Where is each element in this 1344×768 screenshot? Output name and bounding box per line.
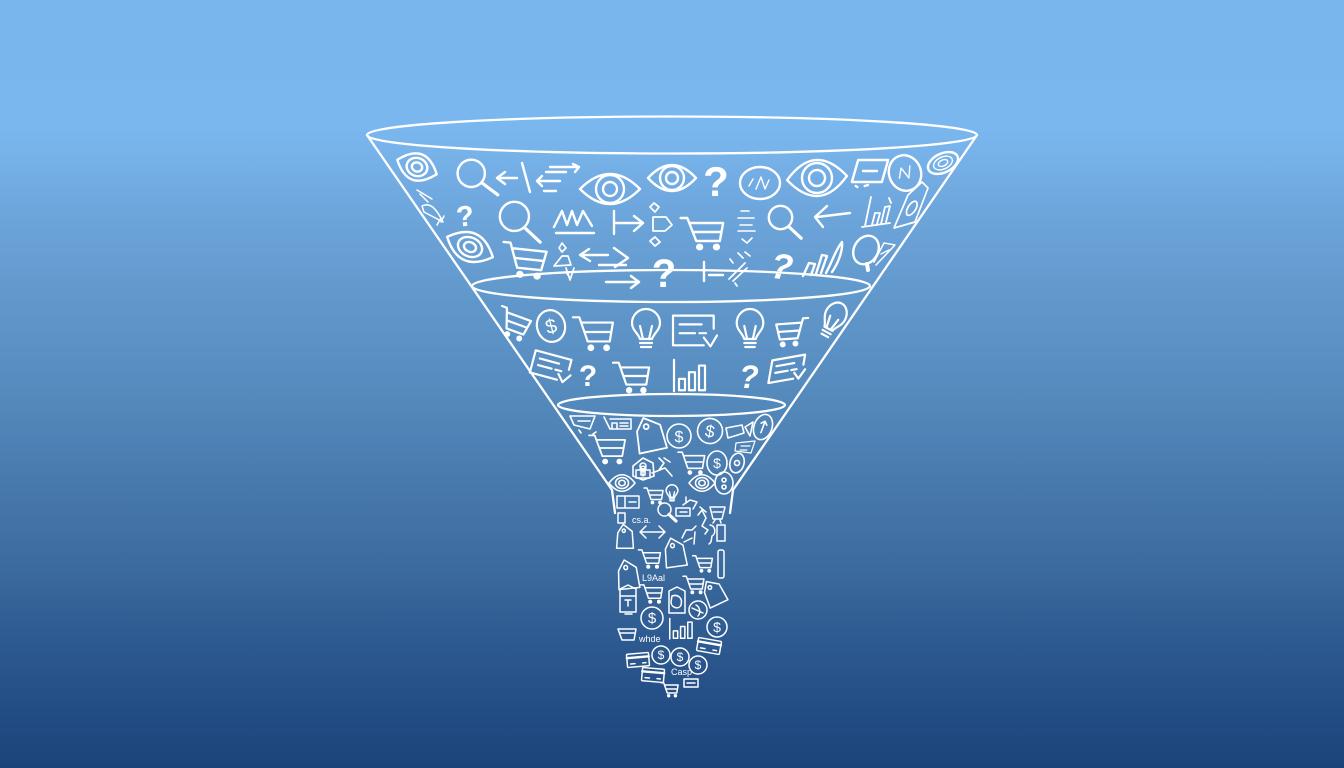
icon: cart [613,363,649,392]
icon: dollar coin: $ [695,658,702,672]
icon: small document [874,243,895,265]
tier 1: awareness icons [393,147,962,296]
icon: credit card [641,667,665,683]
icon: cart [683,576,704,593]
icon: diamond stack [650,203,672,246]
icon: dollar coin [696,417,724,445]
icon: magnifier [769,206,801,238]
icon: dollar coin: $ [677,650,684,664]
icon: small card [684,679,698,687]
icon: slanted tag [894,182,928,228]
icon: zigzag [554,211,594,233]
icon: light bulb [666,485,678,501]
hand-drawn label: Casp [671,667,692,677]
icon: plug box [620,585,636,614]
icon: arrow lines [537,164,579,191]
icon: cart [661,683,678,697]
icon: document and arrow [726,422,753,438]
lower rim [558,394,785,416]
icon: eye [689,475,715,491]
icon: cart [678,452,705,474]
icon: question mark: ? [652,252,676,296]
hand-drawn label: L9Aal [642,573,665,583]
icon: bar and arrow [614,211,643,234]
icon: bar chart [670,618,692,639]
icon: cart [776,318,810,347]
icon: tag [616,559,640,590]
icon: bars box [617,496,639,523]
icon: globe lantern [669,587,685,613]
icon: cart [693,556,712,572]
icon: document with check [673,316,717,346]
icon: light bulb [632,309,660,347]
icon: dollar coin [707,451,727,475]
icon: italic question mark: ? [768,245,796,288]
icon: dollar coin: $ [648,610,657,627]
spout: falling icons [616,466,728,697]
icon: circle with arrow [750,412,776,442]
icon: scribble [682,526,696,544]
icon: dollar coin: $ [704,421,717,442]
icon: cart [493,306,532,342]
icon: tag [617,524,633,548]
icon: pencil marks [729,252,750,286]
icon: dollar coin: $ [713,455,721,471]
funnel rims [367,116,977,416]
icon: cart [640,585,662,603]
icon: question mark: ? [703,158,729,205]
icon: question mark: ? [579,360,597,393]
icon: dollar coin: $ [713,619,721,635]
icon: credit card [626,652,650,668]
icon: question mark: ? [455,200,475,234]
icon: tall rectangle [718,550,724,578]
icon: dollar coin: $ [675,429,684,446]
icon: stacked dashes [738,211,755,243]
icon: tag [633,414,667,454]
icon: eye [580,174,640,204]
icon: small coin [689,601,707,619]
funnel right side [730,135,977,513]
icon: dollar coin: $ [658,648,665,662]
icon: small cart [710,507,725,523]
icon: dollar coin [641,607,663,629]
hand-drawn label: cs.a. [632,515,651,525]
icon: tag [662,536,687,568]
tier 3: decision icons [570,412,776,494]
icon: credit card [696,637,722,655]
icon: slanted document [850,160,888,187]
icon: scribble [698,510,708,534]
icon: tilted light bulb [816,299,851,340]
icon: magnifier [658,503,676,521]
icon: eye [648,165,696,191]
icon: eye [393,147,441,187]
icon: cart [500,242,547,279]
icon: small circle [715,472,733,494]
icon: dollar coin [533,307,569,345]
icon: rising bars [803,242,842,276]
icon: small basket [618,629,636,640]
icon: small circle [728,452,746,474]
icon: dollar coin [671,648,689,666]
icon: cart [589,435,625,463]
icon: circle with wave [740,167,780,199]
icon: bar chart [674,360,705,391]
icon: dollar coin: $ [543,315,559,339]
icon: light bulb [737,309,763,347]
icon: dollar coin [689,656,707,674]
icon: dollar coin [707,617,727,637]
icon: magnifier [456,157,498,199]
icon: magnifier [500,202,540,242]
icon: padlock [636,466,650,478]
icon: double arrow [640,526,665,538]
icon: dollar coin [667,424,691,448]
icon: arrow right [606,276,639,288]
icon: diamond person [554,243,574,280]
icon: magnifier [848,231,884,270]
icon: cart [681,218,723,249]
icon: eye [441,224,499,270]
icon: scribble [652,458,672,476]
icon: arrow left [815,206,850,227]
icon: eye [609,475,635,491]
icon: italic question mark: ? [739,359,759,395]
icon: cart [573,317,613,350]
icon: small document [570,416,596,434]
funnel left side [367,135,615,513]
middle rim [472,270,870,302]
icon: scribble [683,497,706,512]
icon: small sign [735,441,755,453]
icon: small document [676,508,690,516]
icon: slanted bar chart [862,197,891,227]
icon: circle with squiggle [884,151,926,195]
icon: cross dash [704,262,723,281]
icon: tag [699,577,728,608]
icon: bars document [604,417,631,429]
icon: flat eye [924,148,962,178]
icon: cart [638,550,660,568]
icon: tall rectangle [717,525,725,541]
icon: cart [644,488,663,504]
icon: small squiggles [417,190,444,225]
tier 2: consideration icons [493,299,851,395]
hand-drawn label: whde [638,634,661,644]
icon: eye [786,158,848,198]
icon: hook [709,525,715,544]
top rim [367,116,977,154]
icon: slanted document [768,354,808,384]
funnel outline [367,135,977,513]
icon: dollar coin [652,646,670,664]
icon: slanted document [530,350,574,384]
icon: double arrows [580,248,628,267]
icon: arrow and slash [497,163,530,192]
icon: padlock circle [633,458,654,480]
